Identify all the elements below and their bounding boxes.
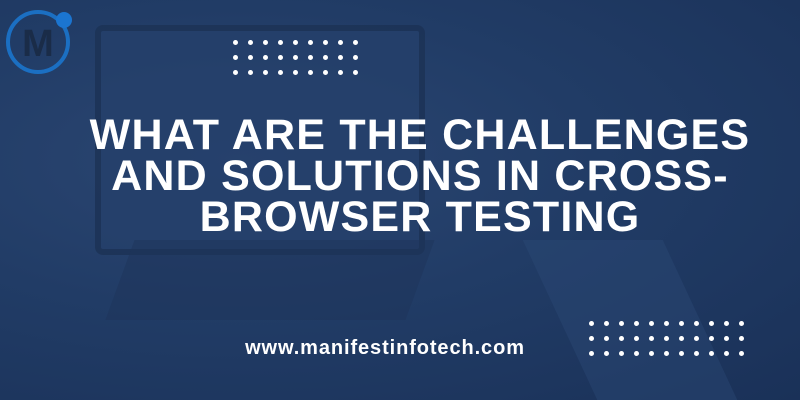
background laptop shape: [95, 25, 425, 255]
bottom dot grid: [589, 321, 744, 356]
title: BROWSER TESTING: [200, 193, 640, 241]
website url: www.manifestinfotech.com: [245, 337, 525, 359]
background keyboard: [105, 240, 435, 320]
title: AND SOLUTIONS IN CROSS-: [111, 152, 729, 200]
top dot grid: [233, 40, 358, 75]
title: [90, 111, 750, 241]
background highlight: [523, 240, 737, 400]
logo: [6, 10, 72, 74]
logo: M: [22, 23, 54, 65]
title: WHAT ARE THE CHALLENGES: [90, 111, 750, 159]
